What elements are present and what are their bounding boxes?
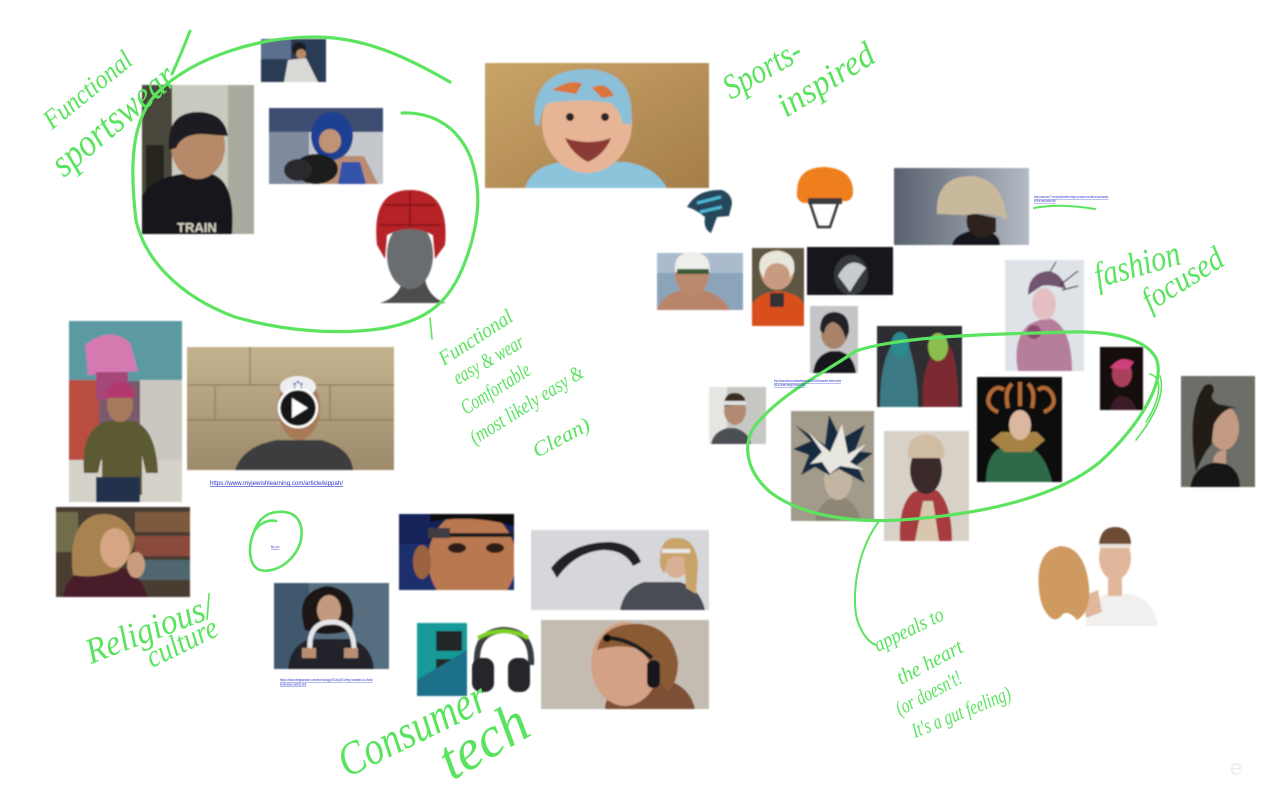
underline below small link [1034, 206, 1095, 209]
handwritten note: functional, easy to wear: Clean) [528, 412, 594, 462]
handwritten label: religious / culture: culture [140, 609, 224, 674]
watermark fragment: e [1230, 755, 1242, 780]
link: my jewish learning kippah: https://www.myjewishlearning.com/article/kippah/ [210, 480, 343, 487]
photo: bearded man in ornate helmet [894, 168, 1029, 245]
handwritten note: appeals to the heart [870, 602, 1014, 743]
handwritten note: appeals to the heart: It's a gut feeling) [907, 681, 1014, 743]
stroke beside sportswear heading [172, 31, 190, 74]
link: fashion tech helmet: https://www.forbes.com/sites/fashion-tech/2018/05/wearable-helmet-article [774, 379, 841, 383]
link: helmet article: for-the-head-article-link [1034, 199, 1056, 203]
handwritten label: sports-inspired: Sports- [716, 31, 809, 107]
handwritten label: religious / culture: Religious/ [79, 585, 222, 672]
photo: swimmer with cap and goggles [657, 252, 743, 310]
photo: red padded headguard on mannequin [376, 190, 446, 303]
handwritten note: functional, easy to wear: Comfortable [456, 358, 535, 419]
photo: woman with ornate gold crown [977, 377, 1062, 482]
leader line to gut-feel note [855, 520, 880, 645]
photo: smiling baby with helmet [485, 63, 709, 188]
photo: man with headband [709, 387, 766, 444]
handwritten note: appeals to the heart: (or doesn't! [891, 665, 966, 720]
handwritten label: functional sportswear: Functional [36, 45, 138, 135]
handwritten note: functional, easy to wear [433, 304, 594, 462]
photo: woman holding EEG headset [274, 583, 389, 669]
photo: astronaut in orange suit [752, 248, 804, 326]
handwritten note: appeals to the heart: the heart [892, 634, 968, 689]
photo: woman in pink fashion headpiece [1005, 260, 1084, 371]
photo: man with EEG ear sensor in profile [541, 620, 709, 709]
photo: brain-sensing headband product [531, 530, 709, 610]
circle: functional sportswear grouping [133, 37, 478, 339]
handwritten label: fashion focused: fashion [1089, 233, 1185, 296]
link: helmet article: https://www.core77.com/posts/helmet-design-concepts-and-fashion-accessories [1034, 195, 1109, 199]
photo: Google Glass wearer [398, 512, 516, 592]
circle: small religious link [250, 512, 302, 571]
photo: man in Pirates cap: TRAIN [177, 220, 217, 235]
photo: woman in tan hijab [56, 507, 190, 597]
link: EEG headset article: https://www.theguardian.com/technology/2014/jul/31/eeg-headset-to-check [280, 678, 373, 682]
photo: boxer in blue headgear [269, 108, 383, 184]
handwritten note: functional, easy to wear: Functional [433, 304, 517, 371]
photo: woman with red mask in dark [1100, 347, 1143, 410]
handwritten label: consumer tech: tech [426, 689, 540, 792]
photo: woman holding a wig [1038, 527, 1158, 626]
link: fashion tech helmet: link-to-helmet-design-feature-story [774, 383, 805, 387]
handwritten label: consumer tech: Consumer [329, 671, 496, 788]
photo: model in patterned mask and dress [884, 431, 969, 541]
photo: Sikh man before colorful mural [69, 321, 182, 502]
handwritten label: fashion focused [1089, 233, 1231, 319]
handwritten label: sports-inspired: inspired [770, 34, 882, 125]
photo: orange climbing helmet [797, 167, 853, 227]
handwritten label: fashion focused: focused [1135, 240, 1231, 319]
photo: blue bike helmet [687, 190, 732, 233]
photo: man in Pirates cap [142, 85, 254, 235]
photo: geometric blue and white hat [791, 411, 874, 521]
photo: man wearing tech helmet [810, 306, 858, 373]
photo: two figures with blue and green faces [877, 326, 962, 407]
photo: baseball batter [261, 39, 326, 82]
circle: fashion grouping [748, 332, 1161, 521]
handwritten note: functional, easy to wear: (most likely easy & [465, 360, 588, 449]
photo: man wearing kippah before stone wall [187, 347, 394, 470]
handwritten note: functional, easy to wear: easy & wear [448, 329, 529, 389]
photo: dark sleek helmet [807, 247, 893, 295]
handwritten label: functional sportswear: sportswear [42, 55, 185, 185]
photo: woman with long ponytail [1181, 376, 1255, 487]
handwritten label: sports-inspired [716, 31, 882, 125]
link: inside small circle: tk.co [271, 544, 280, 549]
link: EEG headset article: brainwave-article-link [280, 682, 307, 686]
handwritten note: appeals to the heart: appeals to [870, 602, 948, 656]
photo: tablets and green headphones [417, 623, 531, 696]
